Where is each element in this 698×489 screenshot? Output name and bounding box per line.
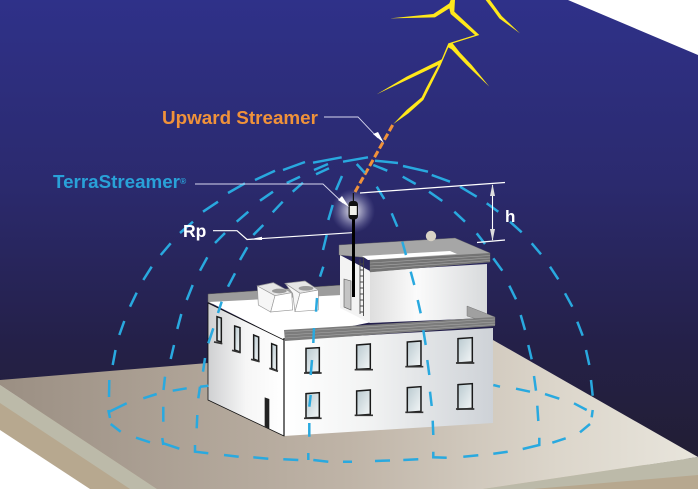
protection dome: front meridian [308, 176, 342, 460]
protection dome: inner [195, 168, 329, 453]
upward streamer [355, 125, 393, 192]
label: terrastreamer: TerraStreamer [53, 171, 180, 192]
mast [352, 218, 355, 297]
leader line: upward streamer [324, 117, 384, 143]
label: h: h [505, 207, 515, 226]
penthouse door [344, 279, 351, 310]
roof dome vent [426, 231, 436, 241]
left wall [208, 303, 284, 436]
Rp radius leader [213, 231, 352, 240]
building [208, 231, 495, 436]
lightning bolt [377, 0, 520, 124]
ground slab [0, 340, 698, 489]
air conditioning units [257, 281, 318, 312]
label: Rp: Rp [183, 221, 206, 241]
label: upward streamer: Upward Streamer [162, 107, 318, 128]
protection zone ground outline [109, 385, 590, 462]
leader line: terrastreamer [195, 184, 349, 207]
protection dome: right meridians [357, 164, 539, 458]
ladder [360, 257, 364, 316]
front wall [284, 328, 493, 436]
front and left windows [214, 317, 474, 429]
h dimension [360, 182, 505, 242]
main roof [209, 295, 372, 340]
protection dome: middle [162, 164, 328, 445]
rear roof parapet [208, 285, 342, 304]
front cornice [284, 306, 495, 341]
side door [265, 397, 269, 429]
penthouse cornice [339, 231, 490, 272]
registered mark: ® [180, 176, 187, 186]
protection dome: outer [108, 157, 593, 418]
penthouse walls [340, 255, 487, 323]
terrastreamer device [331, 189, 375, 297]
